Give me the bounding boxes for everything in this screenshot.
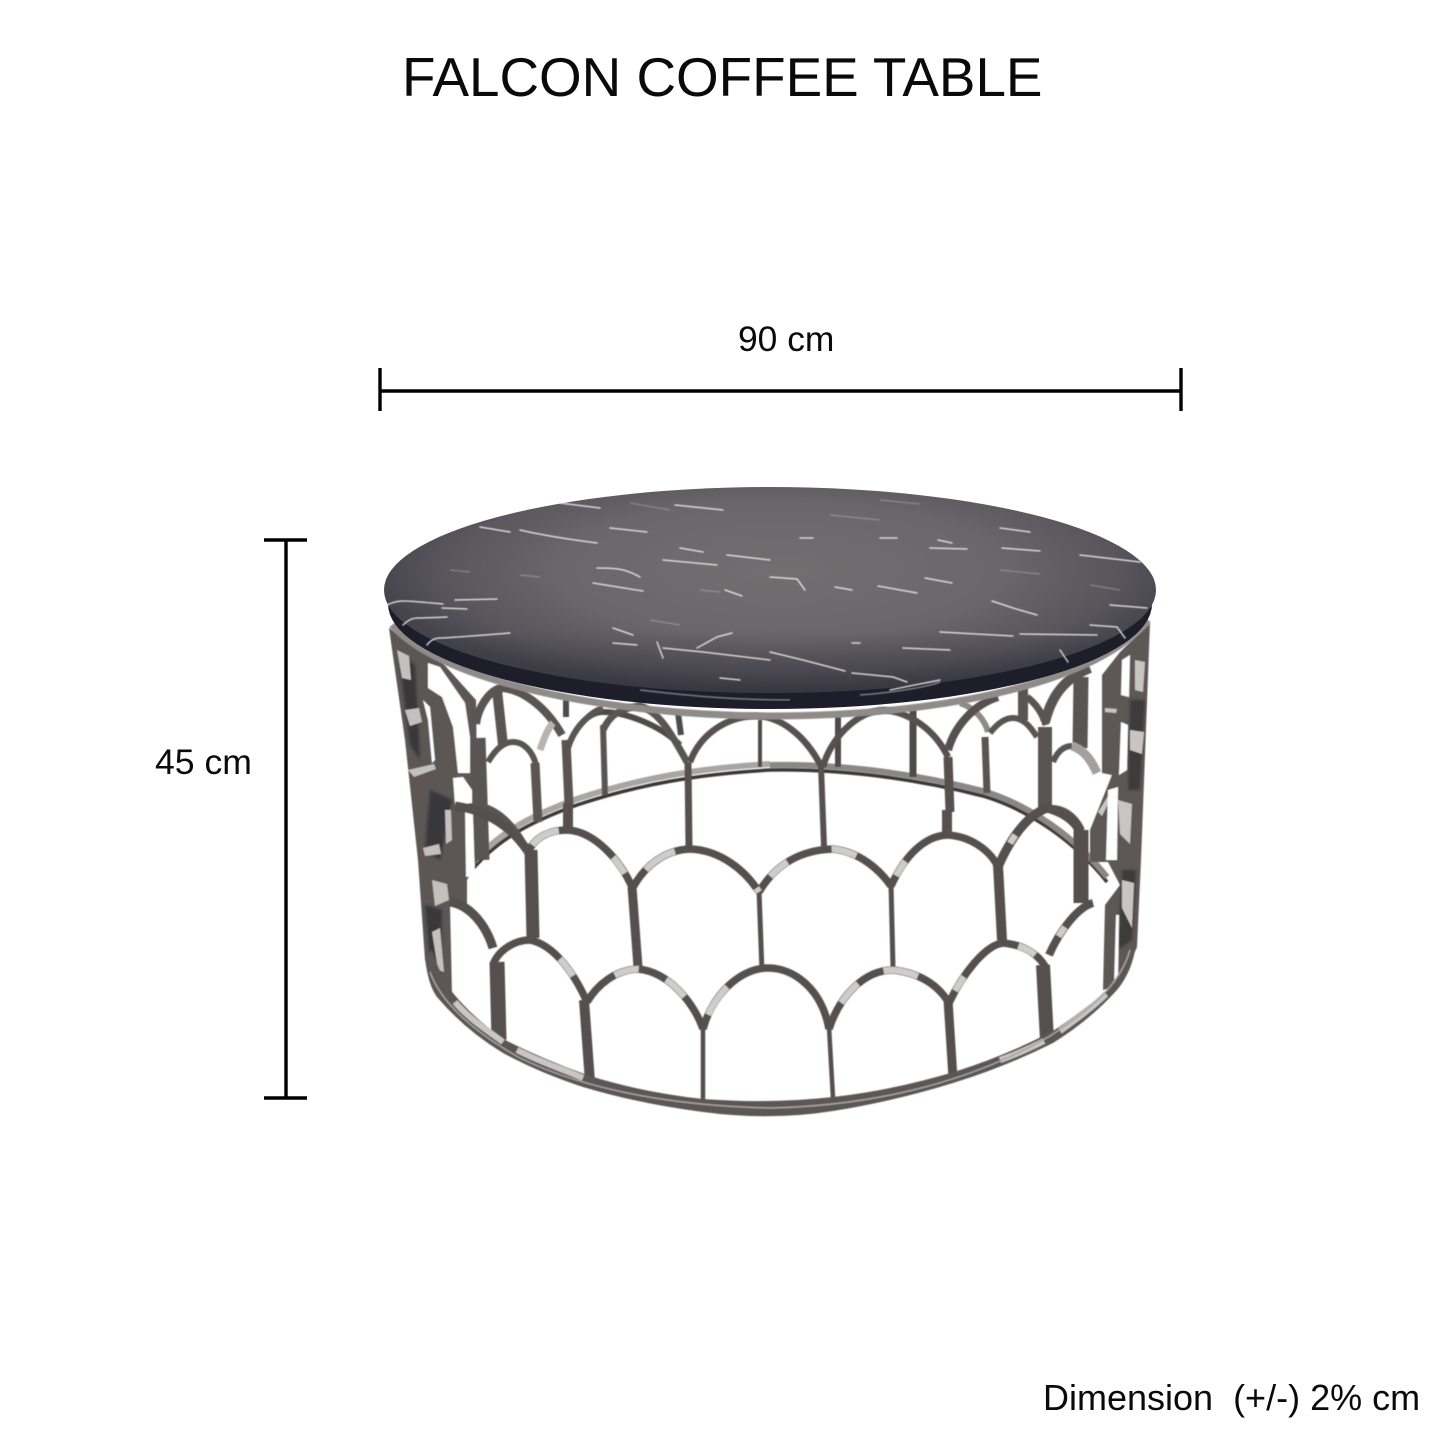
upper centre arches <box>568 697 998 848</box>
right side frame mass <box>1090 623 1150 990</box>
height label: 45 cm <box>155 742 252 782</box>
right side streaks <box>1118 700 1145 950</box>
top surface <box>384 487 1156 693</box>
marble top <box>384 487 1156 716</box>
right side openings <box>1106 655 1130 987</box>
middle ring <box>467 764 1107 882</box>
left side frame mass <box>389 628 478 997</box>
chrome highlights <box>493 808 1093 1029</box>
edge highlight <box>640 682 940 700</box>
width label: 90 cm <box>738 319 834 359</box>
bottom row arches <box>493 903 1093 1102</box>
left side openings <box>423 663 475 877</box>
base ring <box>425 945 1136 1116</box>
height measure line <box>264 540 307 1098</box>
left upper arches <box>476 688 687 860</box>
right upper arches <box>985 668 1097 830</box>
middle row arches <box>450 806 1081 972</box>
width dimension <box>380 319 1181 411</box>
title: FALCON COFFEE TABLE <box>402 46 1042 108</box>
coffee table <box>384 487 1156 1116</box>
chrome rim <box>392 620 1148 716</box>
tolerance note: Dimension (+/-) 2% cm <box>1043 1377 1420 1418</box>
height dimension <box>155 540 307 1098</box>
width measure line <box>380 368 1181 411</box>
marble veins <box>387 503 1147 690</box>
left side streaks <box>398 650 452 985</box>
top edge <box>388 499 1152 709</box>
metal frame <box>389 623 1150 1116</box>
back arches <box>566 700 988 777</box>
faint marble veins <box>450 500 1120 625</box>
